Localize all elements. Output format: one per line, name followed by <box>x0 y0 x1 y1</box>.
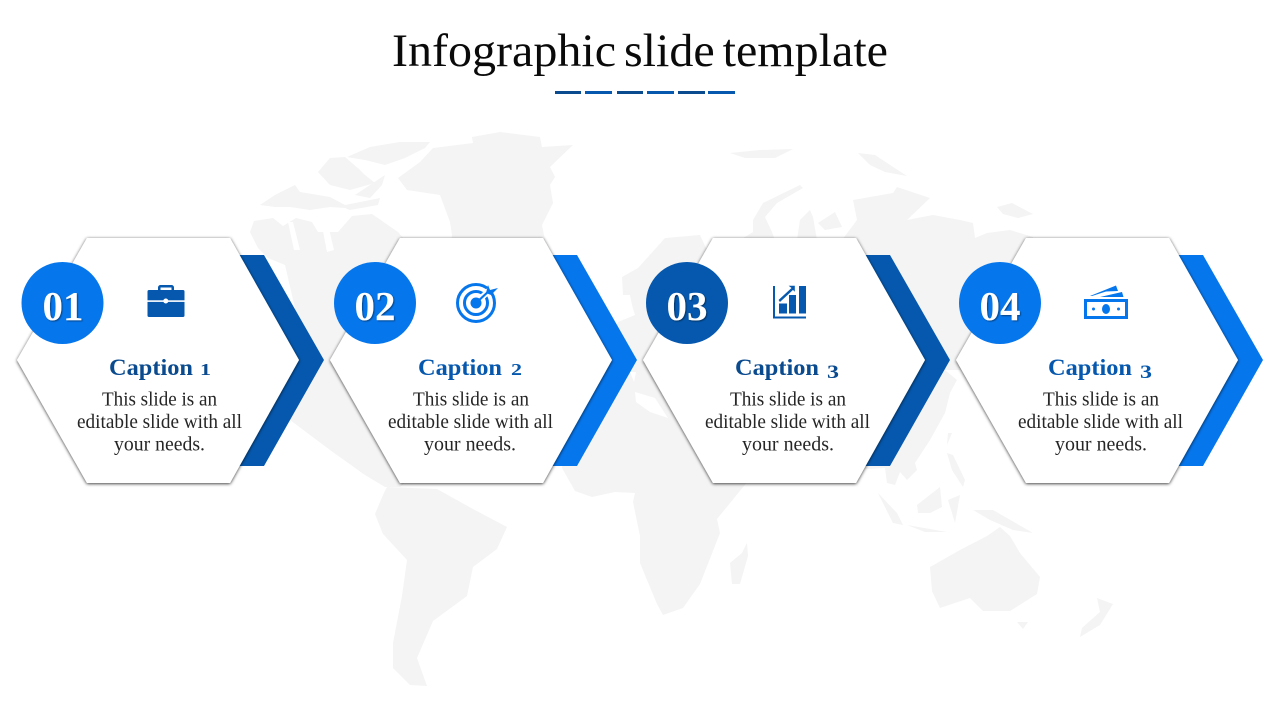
caption 2: Caption <box>418 355 502 380</box>
caption 3 (fourth panel): Caption <box>1048 355 1132 380</box>
arrow: step 4 chevron <box>1169 255 1263 466</box>
title underline dashes <box>555 91 735 94</box>
icon: bar chart <box>773 286 806 318</box>
title: Infographic slide template <box>392 25 888 77</box>
hexagon: step 1 <box>17 238 299 483</box>
text block 2: editable slide with all <box>388 412 554 433</box>
text block 4: your needs. <box>1055 434 1147 456</box>
text block 3: your needs. <box>742 434 834 456</box>
panel: step 2 <box>330 238 637 483</box>
text block 2 <box>388 390 554 456</box>
text block 3: This slide is an <box>730 390 846 410</box>
text block 4: editable slide with all <box>1018 412 1184 433</box>
text block 2: This slide is an <box>413 390 529 410</box>
caption 2: 2 <box>511 360 522 379</box>
number badge: 01 <box>22 262 104 344</box>
panel: step 3 <box>643 238 950 483</box>
number badge: 03 <box>646 262 728 344</box>
caption 3 (fourth panel): 3 <box>1140 362 1152 383</box>
number badge: 02: 02 <box>354 283 396 329</box>
text block 1: This slide is an <box>102 390 217 410</box>
icon: banknotes <box>1084 286 1128 319</box>
number badge: 01: 01 <box>42 283 84 329</box>
arrow: step 3 chevron <box>856 255 950 466</box>
text block 1: your needs. <box>114 434 205 456</box>
arrow: step 1 chevron <box>230 255 324 466</box>
text block 1 <box>77 390 243 456</box>
caption 3: 3 <box>827 362 839 383</box>
caption 1: 1 <box>200 360 211 379</box>
text block 3: editable slide with all <box>705 412 871 433</box>
map sea gaps <box>288 216 668 418</box>
text block 2: your needs. <box>424 434 516 456</box>
arrow: step 2 chevron <box>543 255 637 466</box>
text block 1: editable slide with all <box>77 412 243 433</box>
number badge: 04: 04 <box>980 283 1020 329</box>
hexagon: step 4 <box>956 238 1238 483</box>
text block 4: This slide is an <box>1043 390 1159 410</box>
text block 3 <box>705 390 871 456</box>
number badge: 02 <box>334 262 416 344</box>
icon: briefcase <box>148 285 184 317</box>
hexagon: step 3 <box>643 238 925 483</box>
hexagon: step 2 <box>330 238 612 483</box>
panel: step 1 <box>17 238 324 483</box>
panel: step 4 <box>956 238 1263 483</box>
icon: target <box>458 284 498 322</box>
number badge: 04 <box>959 262 1041 344</box>
number badge: 03: 03 <box>666 283 708 329</box>
caption 3: Caption <box>735 355 819 380</box>
world map background <box>250 132 1113 686</box>
text block 4 <box>1018 390 1184 456</box>
caption 1: Caption <box>109 355 193 380</box>
